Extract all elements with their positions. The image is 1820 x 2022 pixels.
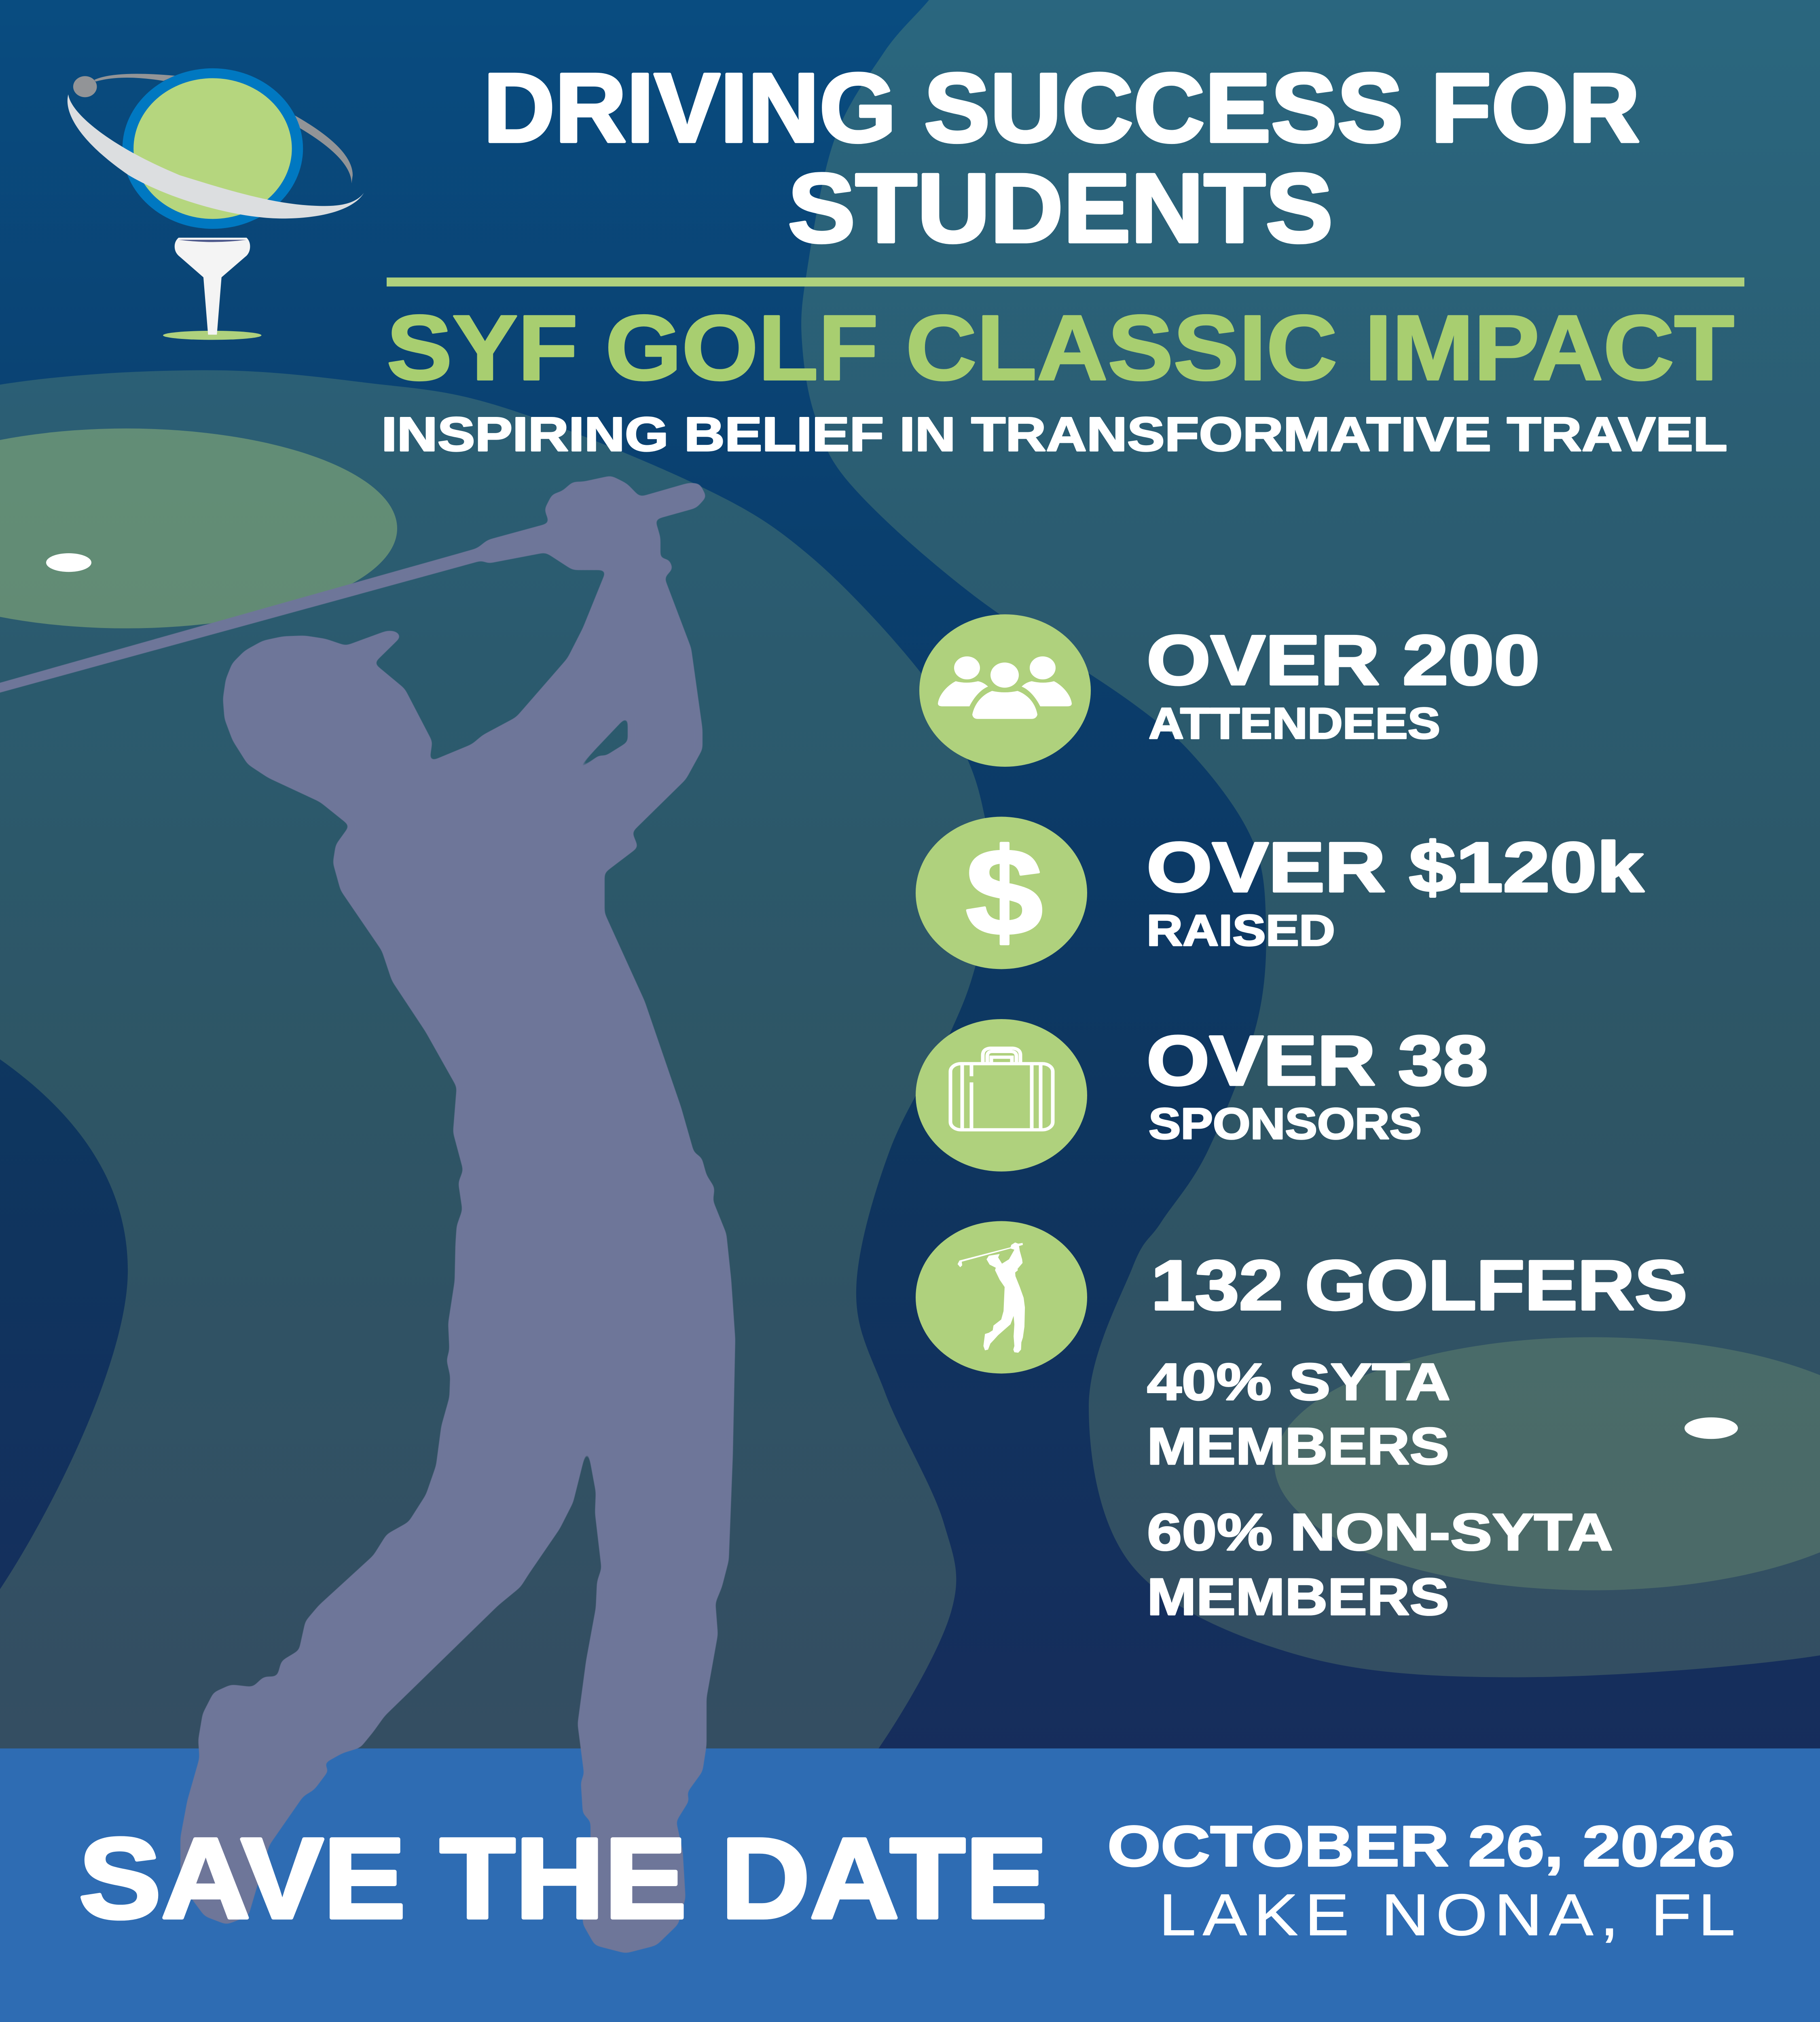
logo: tee base	[163, 331, 261, 340]
logo: small moon	[73, 76, 97, 97]
stat value: OVER 200	[1147, 621, 1540, 700]
title: DRIVING SUCCESS FOR	[483, 53, 1640, 163]
stat: raised	[916, 817, 1644, 969]
golf hole: right	[1685, 1417, 1738, 1439]
stat: golfers	[916, 1221, 1687, 1626]
subtitle: SYF GOLF CLASSIC IMPACT	[387, 296, 1734, 400]
logo: tee	[175, 238, 250, 335]
golfer split: SYTA members	[1147, 1353, 1450, 1476]
logo: tee cup	[179, 240, 247, 242]
icon: dollar	[916, 817, 1087, 969]
golf hole: left	[46, 553, 91, 572]
stat label: RAISED	[1147, 906, 1335, 955]
tagline: INSPIRING BELIEF IN TRANSFORMATIVE TRAVEL	[381, 407, 1727, 461]
bottom band	[0, 1749, 1820, 2022]
title divider	[387, 277, 1744, 286]
icon: dollar: $	[965, 823, 1043, 962]
logo: golf ball planet on tee	[68, 68, 364, 340]
golfer split: non-SYTA members	[1147, 1503, 1613, 1626]
golfer split: SYTA members: MEMBERS	[1147, 1417, 1449, 1476]
stat label: SPONSORS	[1149, 1100, 1422, 1148]
fairway: left	[0, 370, 993, 1749]
event location: LAKE NONA, FL	[1159, 1882, 1735, 1948]
title	[483, 53, 1640, 263]
save the date heading: SAVE THE DATE	[79, 1815, 1048, 1942]
stat value: OVER 38	[1147, 1022, 1488, 1100]
title: STUDENTS	[788, 153, 1333, 263]
fairway: top right	[801, 0, 1820, 1677]
stat: attendees	[919, 614, 1540, 767]
golfer split: non-SYTA members: 60% NON-SYTA	[1147, 1503, 1613, 1561]
logo: orbit swoosh	[68, 94, 364, 218]
golfer split: SYTA members: 40% SYTA	[1147, 1353, 1450, 1411]
stat label: ATTENDEES	[1149, 699, 1440, 748]
icon: briefcase	[916, 1019, 1087, 1172]
stat value: 132 GOLFERS	[1151, 1246, 1687, 1325]
logo: orbit back	[94, 74, 353, 184]
green: lower right	[1274, 1337, 1820, 1590]
stat value: OVER $120k	[1147, 828, 1644, 907]
logo: green ball	[133, 78, 292, 219]
icon: people	[919, 614, 1091, 767]
event date: OCTOBER 26, 2026	[1107, 1814, 1735, 1878]
stat: sponsors	[916, 1019, 1488, 1172]
large golfer silhouette	[0, 476, 735, 1953]
green: top left	[0, 429, 397, 628]
icon: golfer	[916, 1221, 1087, 1373]
logo: blue ball rim	[123, 68, 303, 229]
golfer split: non-SYTA members: MEMBERS	[1147, 1568, 1449, 1626]
